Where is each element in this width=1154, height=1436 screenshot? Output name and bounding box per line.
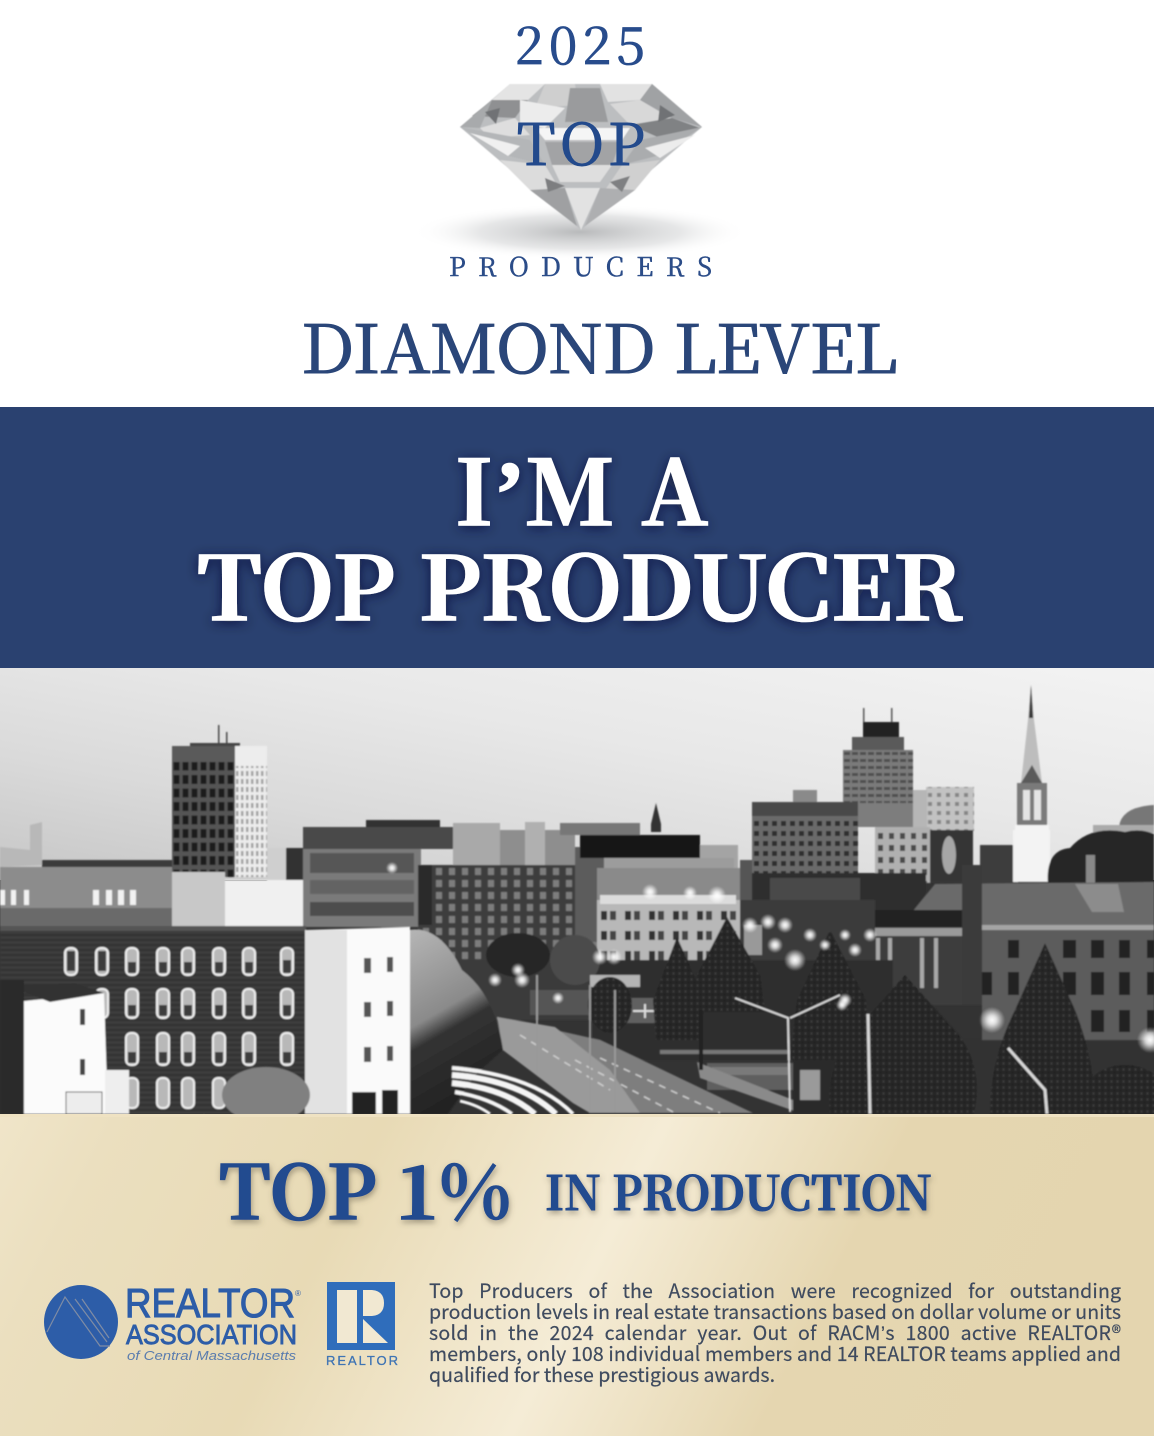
text block: award description [429,1275,1121,1388]
heading: diamond level: DIAMOND LEVEL [301,297,898,393]
office tower [190,725,240,747]
foreground tree [407,930,503,1114]
bright street lights [98,862,1154,1084]
white side building [305,927,410,1114]
producers label: PRODUCERS [449,247,712,284]
icon: diamond with shadow [412,84,748,260]
road [497,1017,753,1113]
small white building [0,980,24,1114]
year heading: 2025 [515,4,645,79]
panel: gold footer [0,1114,1154,1436]
diamond label: TOP [517,98,645,182]
sign [621,998,669,1023]
downtown tall tower [863,708,864,723]
foreground shrub [222,1067,310,1123]
lamp posts [153,975,1047,1114]
right large brick building [900,882,1154,927]
logo: realtor association of central massachusetts: ASSOCIATION [126,1319,297,1350]
banner: I'm a top producer [0,407,1154,668]
logo: realtor association of central massachusetts: of Central Massachusetts [127,1348,297,1363]
logo: realtor association of central massachusetts: ® [295,1289,301,1298]
low white blocks [172,872,225,927]
arched windows [65,948,293,1108]
underpass and wall [707,1063,793,1090]
right background trees and dome [1119,805,1154,827]
badge: 2025 Top Producers diamond logo [412,4,748,284]
logo: realtor association of central massachusetts [44,1280,301,1363]
church steeple [1021,685,1042,783]
text block: award description: qualified for these prestigious awards. [429,1359,775,1388]
light trails [452,1068,573,1114]
photo: black and white city skyline [0,668,1154,1125]
stat: in production: IN PRODUCTION [545,1157,932,1224]
central lights and park [740,900,875,975]
icon: realtor R block mark: REALTOR [326,1353,398,1368]
small spire [651,803,661,832]
icon: realtor R block mark [326,1282,398,1368]
foreground brick building [0,927,306,1114]
logo wordmark: REALTOR [125,1280,295,1326]
text block: award description: Top Producers of the Association were recognized for outstanding [429,1275,1121,1304]
mid buildings [366,820,440,828]
stat: top 1%: TOP 1% [219,1135,511,1241]
banner headline line 2: TOP PRODUCER [197,520,963,646]
far left buildings [0,822,42,867]
text block: award description: production levels in real estate transactions based on dollar volume or units [429,1296,1121,1325]
trees [588,917,1154,1125]
banner headline line 1: I’M A [455,421,708,551]
text block: award description: members, only 108 individual members and 14 REALTOR teams applied and [429,1338,1121,1367]
icon: blue circle with roof lines [44,1285,118,1359]
mid-rise cluster [926,787,974,831]
text block: award description: sold in the 2024 calendar year. Out of RACM’s 1800 active REALTOR® [429,1317,1121,1346]
